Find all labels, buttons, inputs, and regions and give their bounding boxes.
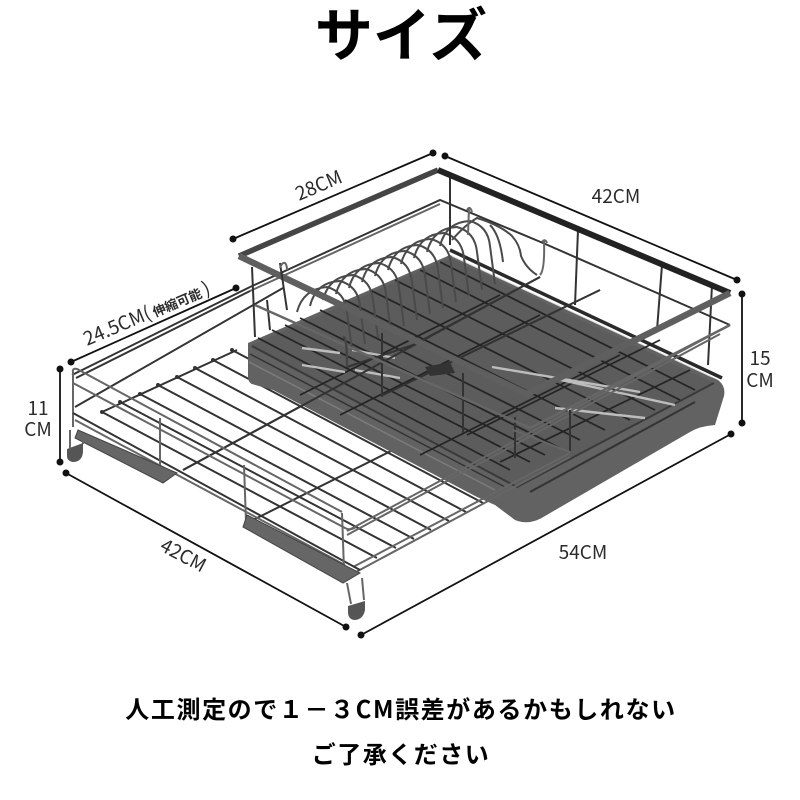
label: 28CM: 28CM (291, 163, 346, 207)
dimension line: 28CM (230, 150, 436, 242)
lower extension rack rails (72, 277, 730, 572)
upper basket back rails and posts (250, 172, 730, 367)
label: 11 CM: 11 (27, 394, 49, 421)
label: 11 CM: CM (24, 415, 52, 442)
label: 15 CM: CM (746, 366, 774, 393)
foot left (67, 430, 83, 462)
note line 1: 人工測定ので１－３CM誤差があるかもしれない (125, 690, 677, 725)
dimension line: 54CM (358, 430, 734, 638)
tray bars (258, 262, 695, 470)
rack support plate right (243, 515, 360, 583)
corner hooks (280, 208, 547, 270)
silver tray rods (302, 348, 675, 418)
dimension line: 42CM bottom (62, 470, 350, 630)
label: 15 CM: 15 (749, 344, 771, 371)
rack support plate left (75, 430, 177, 483)
floor wire studs (100, 348, 234, 414)
drip tray (248, 250, 724, 522)
label: 54CM: 54CM (559, 538, 607, 565)
label: 42CM top: 42CM (592, 182, 640, 209)
plate rack arches (297, 218, 537, 350)
foot right (347, 578, 365, 620)
dimension line: 24.5CM (68, 284, 240, 366)
product illustration: dish rack (67, 170, 730, 620)
tray marks (425, 362, 455, 376)
label: 24.5CM extendable: 24.5CM(伸縮可能) (79, 274, 214, 351)
dimension line: 15CM (738, 290, 746, 426)
dimension line: 11CM (56, 366, 64, 466)
note line 2: ご了承ください (312, 735, 490, 770)
lower rack floor wires (102, 350, 483, 558)
dimension line: 42CM top (442, 152, 740, 284)
upper basket top rim (239, 170, 730, 428)
label: 42CM bottom: 42CM (156, 531, 212, 578)
